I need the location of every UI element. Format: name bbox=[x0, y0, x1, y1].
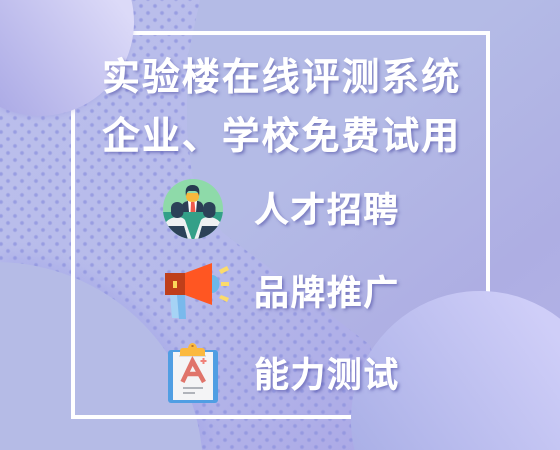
icon: graded clipboard bbox=[168, 343, 218, 403]
label: ability test: 能力测试 bbox=[254, 356, 400, 395]
label: talent recruitment: 人才招聘 bbox=[254, 191, 400, 230]
title line 2: 企业、学校免费试用 bbox=[102, 116, 461, 158]
icon: recruiting meeting bbox=[163, 179, 223, 239]
label: brand promotion: 品牌推广 bbox=[254, 274, 400, 313]
title line 1: 实验楼在线评测系统 bbox=[102, 57, 461, 99]
icon: megaphone bbox=[165, 263, 229, 319]
